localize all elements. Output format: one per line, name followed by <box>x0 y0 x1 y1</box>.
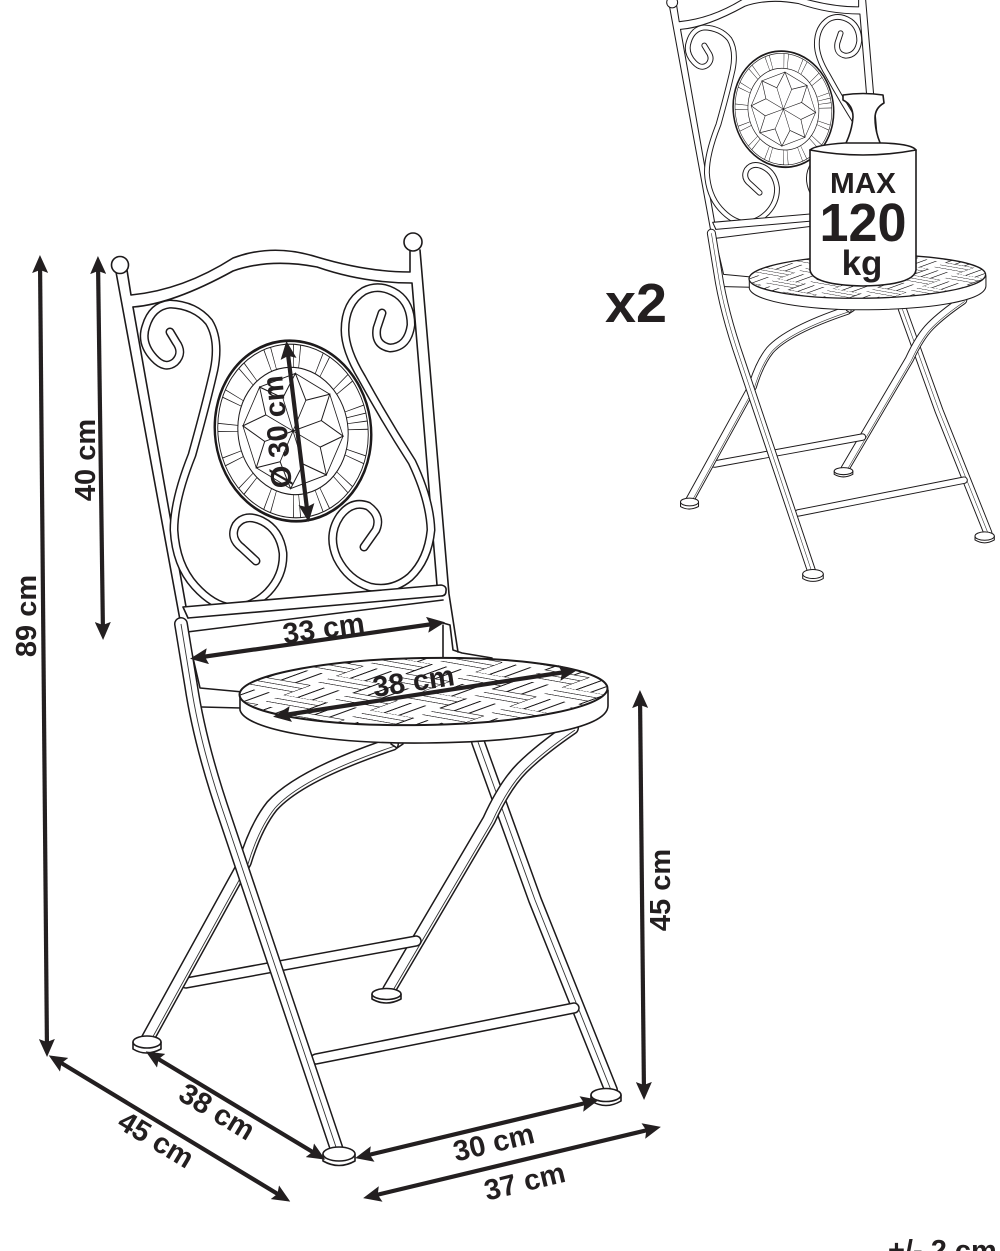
dimension: overall height 89 cm <box>11 260 47 1052</box>
mosaic medallion <box>203 331 383 531</box>
left knob <box>112 256 128 274</box>
front left leg <box>181 624 337 1150</box>
dimension: inner depth 38 cm: 38 cm <box>173 1077 260 1147</box>
foot: rear left <box>133 1036 161 1053</box>
120 label: 120 <box>820 193 906 253</box>
dimension: inner width 30 cm: 30 cm <box>450 1118 538 1168</box>
left scroll <box>144 304 283 608</box>
kg label: kg <box>842 244 882 283</box>
dimension: back height 40 cm <box>70 261 103 635</box>
dimension: medallion 30 cm <box>257 346 308 517</box>
dimension: outer depth 45 cm: 45 cm <box>112 1105 199 1175</box>
dimension: back width 33 cm: 33 cm <box>281 608 367 651</box>
weight: max 120 kg <box>810 94 916 286</box>
front right leg <box>389 728 575 992</box>
rear left leg <box>147 744 395 1042</box>
small chair illustration <box>667 0 994 581</box>
dimension: outer width 37 cm <box>368 1128 656 1207</box>
right knob <box>404 233 422 251</box>
dimension: seat diameter 38 cm <box>278 660 572 716</box>
back rail <box>183 585 446 618</box>
large chair illustration <box>112 233 621 1166</box>
foot: front left <box>323 1147 355 1166</box>
weight body <box>810 143 916 286</box>
dimension: inner depth 38 cm <box>150 1054 321 1157</box>
dimension: seat height 45 cm <box>640 695 677 1095</box>
foot: front right <box>591 1088 621 1106</box>
dimension: back height 40 cm: 40 cm <box>70 419 102 501</box>
lower crossbar <box>316 1008 574 1059</box>
dimension: outer depth 45 cm <box>53 1058 286 1199</box>
quantity: x2: x2 <box>605 272 667 334</box>
dimension: seat height 45 cm: 45 cm <box>645 849 677 931</box>
under-seat bracket <box>391 744 403 748</box>
weight top edge <box>810 150 916 155</box>
dimension: outer width 37 cm: 37 cm <box>481 1157 569 1207</box>
upper crossbar <box>186 941 416 983</box>
weight neck <box>843 94 884 147</box>
mosaic seat top <box>235 650 615 735</box>
seat rim <box>240 690 608 743</box>
dimension: back width 33 cm <box>195 608 440 658</box>
dimension: seat diameter 38 cm: 38 cm <box>371 660 457 704</box>
foot: rear inner <box>372 988 401 1003</box>
dimension: medallion 30 cm: Ø 30 cm <box>257 374 299 489</box>
right scroll <box>333 288 431 588</box>
MAX label: MAX <box>830 168 897 200</box>
backrest frame <box>116 250 492 708</box>
dimension: inner width 30 cm <box>360 1101 594 1168</box>
rear right leg <box>478 742 611 1090</box>
dimension: overall height 89 cm: 89 cm <box>11 575 43 657</box>
